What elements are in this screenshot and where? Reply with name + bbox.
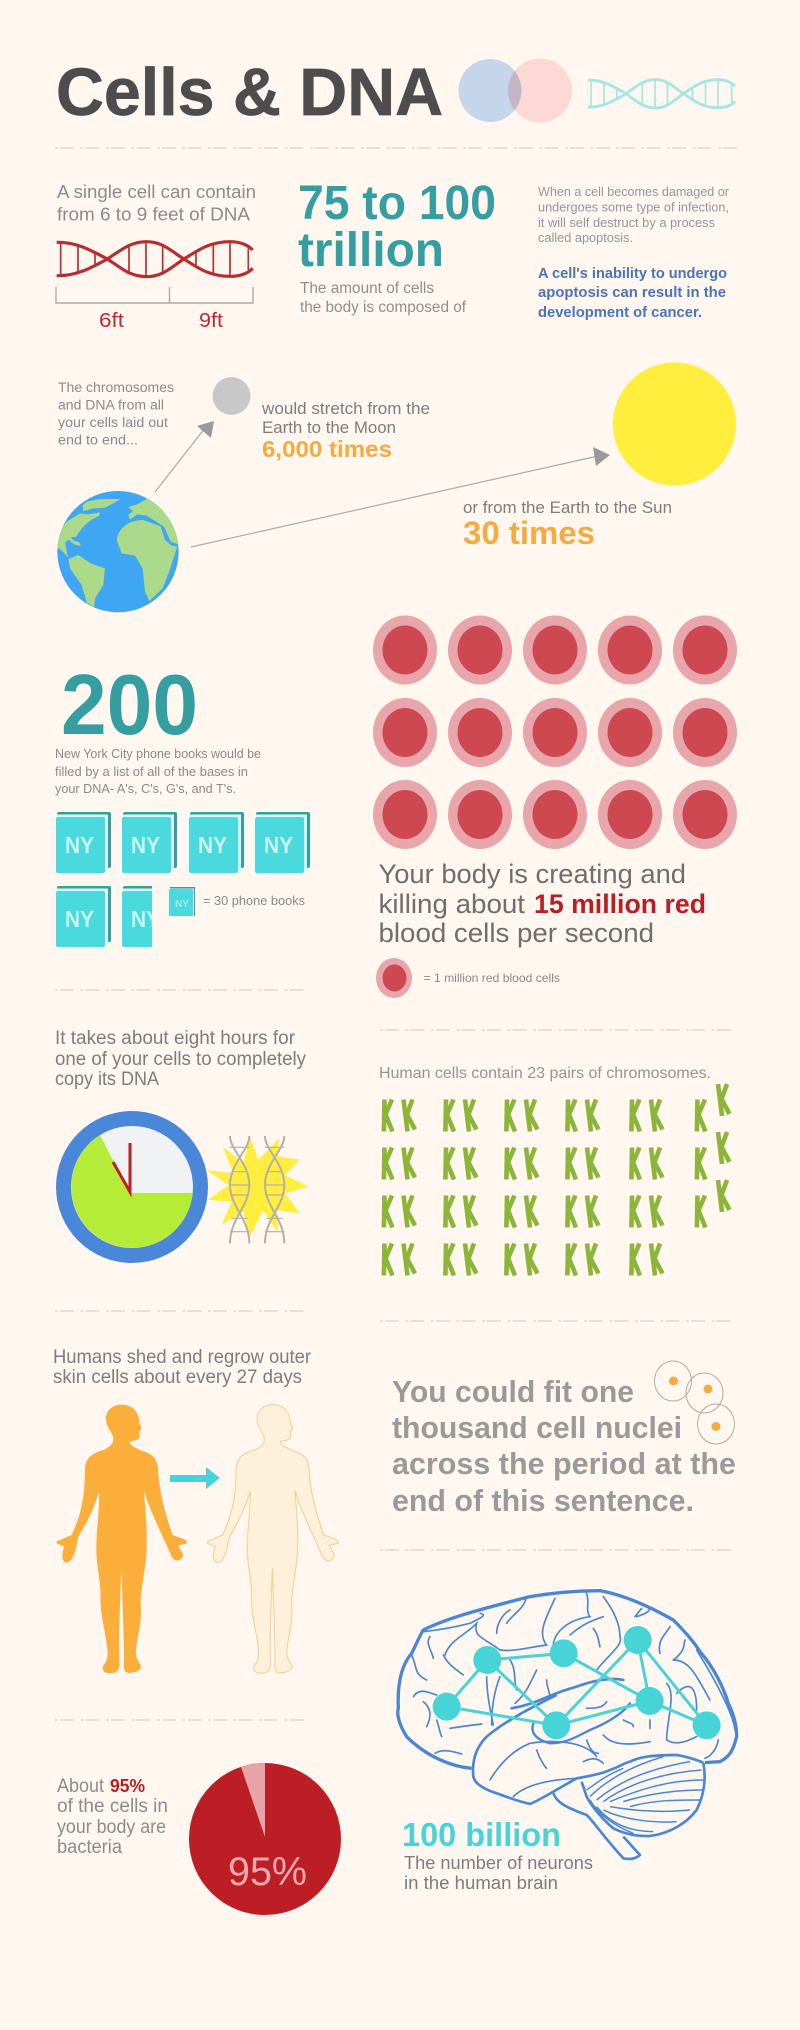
icon: sun [613,362,736,486]
pie chart: 95% [189,1763,341,1915]
legend: phone book key [169,887,305,916]
text: apoptosis and cancer [538,265,727,321]
icon: cells with nuclei [654,1361,734,1444]
caption: amount of cells [300,280,467,316]
text: Earth to the Moon: would stretch from the [261,399,430,418]
text: apoptosis and cancer: A cell's inability to undergo [538,265,727,282]
divider [55,1719,304,1721]
icon: outlined human body [208,1405,338,1673]
arrow: Earth to Sun [191,447,610,547]
icon: Earth [55,491,183,612]
chromosomes pictogram [384,1084,730,1276]
text: DNA per cell: from 6 to 9 feet of DNA [57,204,251,224]
stat: 100 billion: 100 billion [402,1816,561,1853]
divider [55,147,737,149]
text: bacteria: bacteria [57,1837,122,1858]
icon: orange human body [57,1405,187,1673]
text: cell nuclei: You could fit one [392,1375,634,1409]
text: bacteria [57,1776,168,1858]
arrow: Earth to Moon [155,421,214,492]
cerebellum [587,1757,703,1833]
text: phone books: filled by a list of all of the bases in [55,764,248,779]
icon: brain with neurons [398,1591,737,1859]
caption: neurons [404,1852,593,1893]
text: bacteria: 95% [110,1776,145,1796]
divider [380,1549,732,1551]
divider [55,989,304,991]
divider [380,1320,732,1322]
text: bacteria: your body are [57,1817,166,1838]
brain folds [412,1593,735,1797]
text: apoptosis: called apoptosis. [538,230,633,245]
text: chromosomes laid out: your cells laid out [58,415,168,430]
text: apoptosis [538,184,730,245]
icon: phone book 5 [56,886,111,947]
brain outline [398,1591,737,1859]
text: apoptosis: undergoes some type of infection, [538,200,729,214]
text: chromosomes laid out: and DNA from all [58,398,164,412]
text: Earth to the Moon [261,399,430,462]
icon: clock [56,1111,208,1263]
stat: 200: 200 [61,658,198,753]
stat: 75 to 100 trillion: trillion [298,224,444,277]
text: red blood cells per second: killing about [378,889,526,919]
icon: phone book 1: NY [65,832,94,858]
text: phone books: New York City phone books would be [55,746,261,761]
text: apoptosis and cancer: apoptosis can result in the [538,284,726,301]
scale labels: 9ft [199,310,223,332]
pie chart: 95%: 95% [228,1850,307,1894]
text: cell nuclei: end of this sentence. [392,1484,694,1518]
icon: phone book 4: NY [264,832,293,858]
legend: red blood cell key: = 1 million red blood cells [424,971,560,985]
text: cell nuclei [392,1375,736,1518]
icon: phone book 5: NY [65,906,94,932]
icon: partial phone book [122,886,152,947]
caption: amount of cells: The amount of cells [300,280,434,297]
icon: partial phone book: NY [131,906,160,932]
caption: amount of cells: the body is composed of [300,299,467,316]
icon: phone book 1 [56,812,111,873]
caption: neurons: The number of neurons [404,1852,593,1873]
arrow: shedding skin [170,1467,220,1489]
text: apoptosis: it will self destruct by a process [538,215,715,230]
icon: phone book 3 [189,812,244,873]
text: Earth to the Sun: or from the Earth to the Sun [463,498,672,517]
icon: teal DNA helix [588,80,735,108]
text: Earth to the Sun: 30 times [463,515,595,551]
icon: moon [212,377,250,415]
legend: phone book key: = 30 phone books [203,893,305,908]
text: apoptosis and cancer: development of cancer. [538,304,702,321]
scale labels [99,310,223,332]
text: apoptosis: When a cell becomes damaged or [538,184,730,199]
text: Earth to the Moon: Earth to the Moon [262,418,396,437]
icon: DNA copying burst [207,1136,308,1243]
divider [55,1310,304,1312]
text: skin cells [53,1347,312,1388]
icon: phone book 2: NY [131,832,160,858]
text: bacteria: of the cells in [57,1796,168,1817]
text: phone books [55,746,261,796]
text: red blood cells per second: Your body is creating and [378,859,686,889]
text: eight hours [55,1028,306,1090]
text: skin cells: Humans shed and regrow outer [53,1347,312,1368]
text: eight hours: one of your cells to completely [55,1049,306,1070]
phone book pictogram [56,812,310,947]
red blood cells grid [373,616,737,849]
stat: 75 to 100 trillion [298,177,496,277]
text: bacteria: About [57,1776,105,1797]
text: skin cells: skin cells about every 27 days [53,1367,302,1388]
stat: 75 to 100 trillion: 75 to 100 [298,177,496,230]
legend: red blood cell key [376,958,560,998]
title: Cells & DNA [56,55,443,130]
icon: overlapping cells [458,58,572,122]
icon: red DNA helix [57,242,253,277]
text: Earth to the Moon: 6,000 times [262,436,392,462]
icon: phone book 2 [122,812,177,873]
divider [380,1029,732,1031]
text: chromosomes laid out: The chromosomes [58,380,174,395]
bracket scale [56,287,253,303]
text: red blood cells per second [378,859,706,948]
text: Earth to the Sun [463,498,672,551]
neuron network [433,1626,721,1739]
text: cell nuclei: thousand cell nuclei [392,1411,682,1445]
icon: phone book 4 [255,812,310,873]
text: DNA per cell: A single cell can contain [57,181,256,202]
text: DNA per cell [57,181,256,224]
text: red blood cells per second: 15 million red [534,889,706,919]
text: red blood cells per second: blood cells per second [378,918,654,948]
text: cell nuclei: across the period at the [392,1447,736,1481]
scale labels: 6ft [99,310,124,332]
icon: phone book 3: NY [198,832,227,858]
caption: neurons: in the human brain [404,1872,558,1893]
text: 23 pairs: Human cells contain 23 pairs of chromosomes. [379,1065,711,1082]
text: eight hours: copy its DNA [55,1069,159,1090]
legend: phone book key: NY [175,899,189,910]
text: eight hours: It takes about eight hours for [55,1028,296,1049]
text: chromosomes laid out [58,380,174,448]
text: chromosomes laid out: end to end... [58,432,138,448]
text: phone books: your DNA- A's, C's, G's, and T's. [55,781,236,796]
